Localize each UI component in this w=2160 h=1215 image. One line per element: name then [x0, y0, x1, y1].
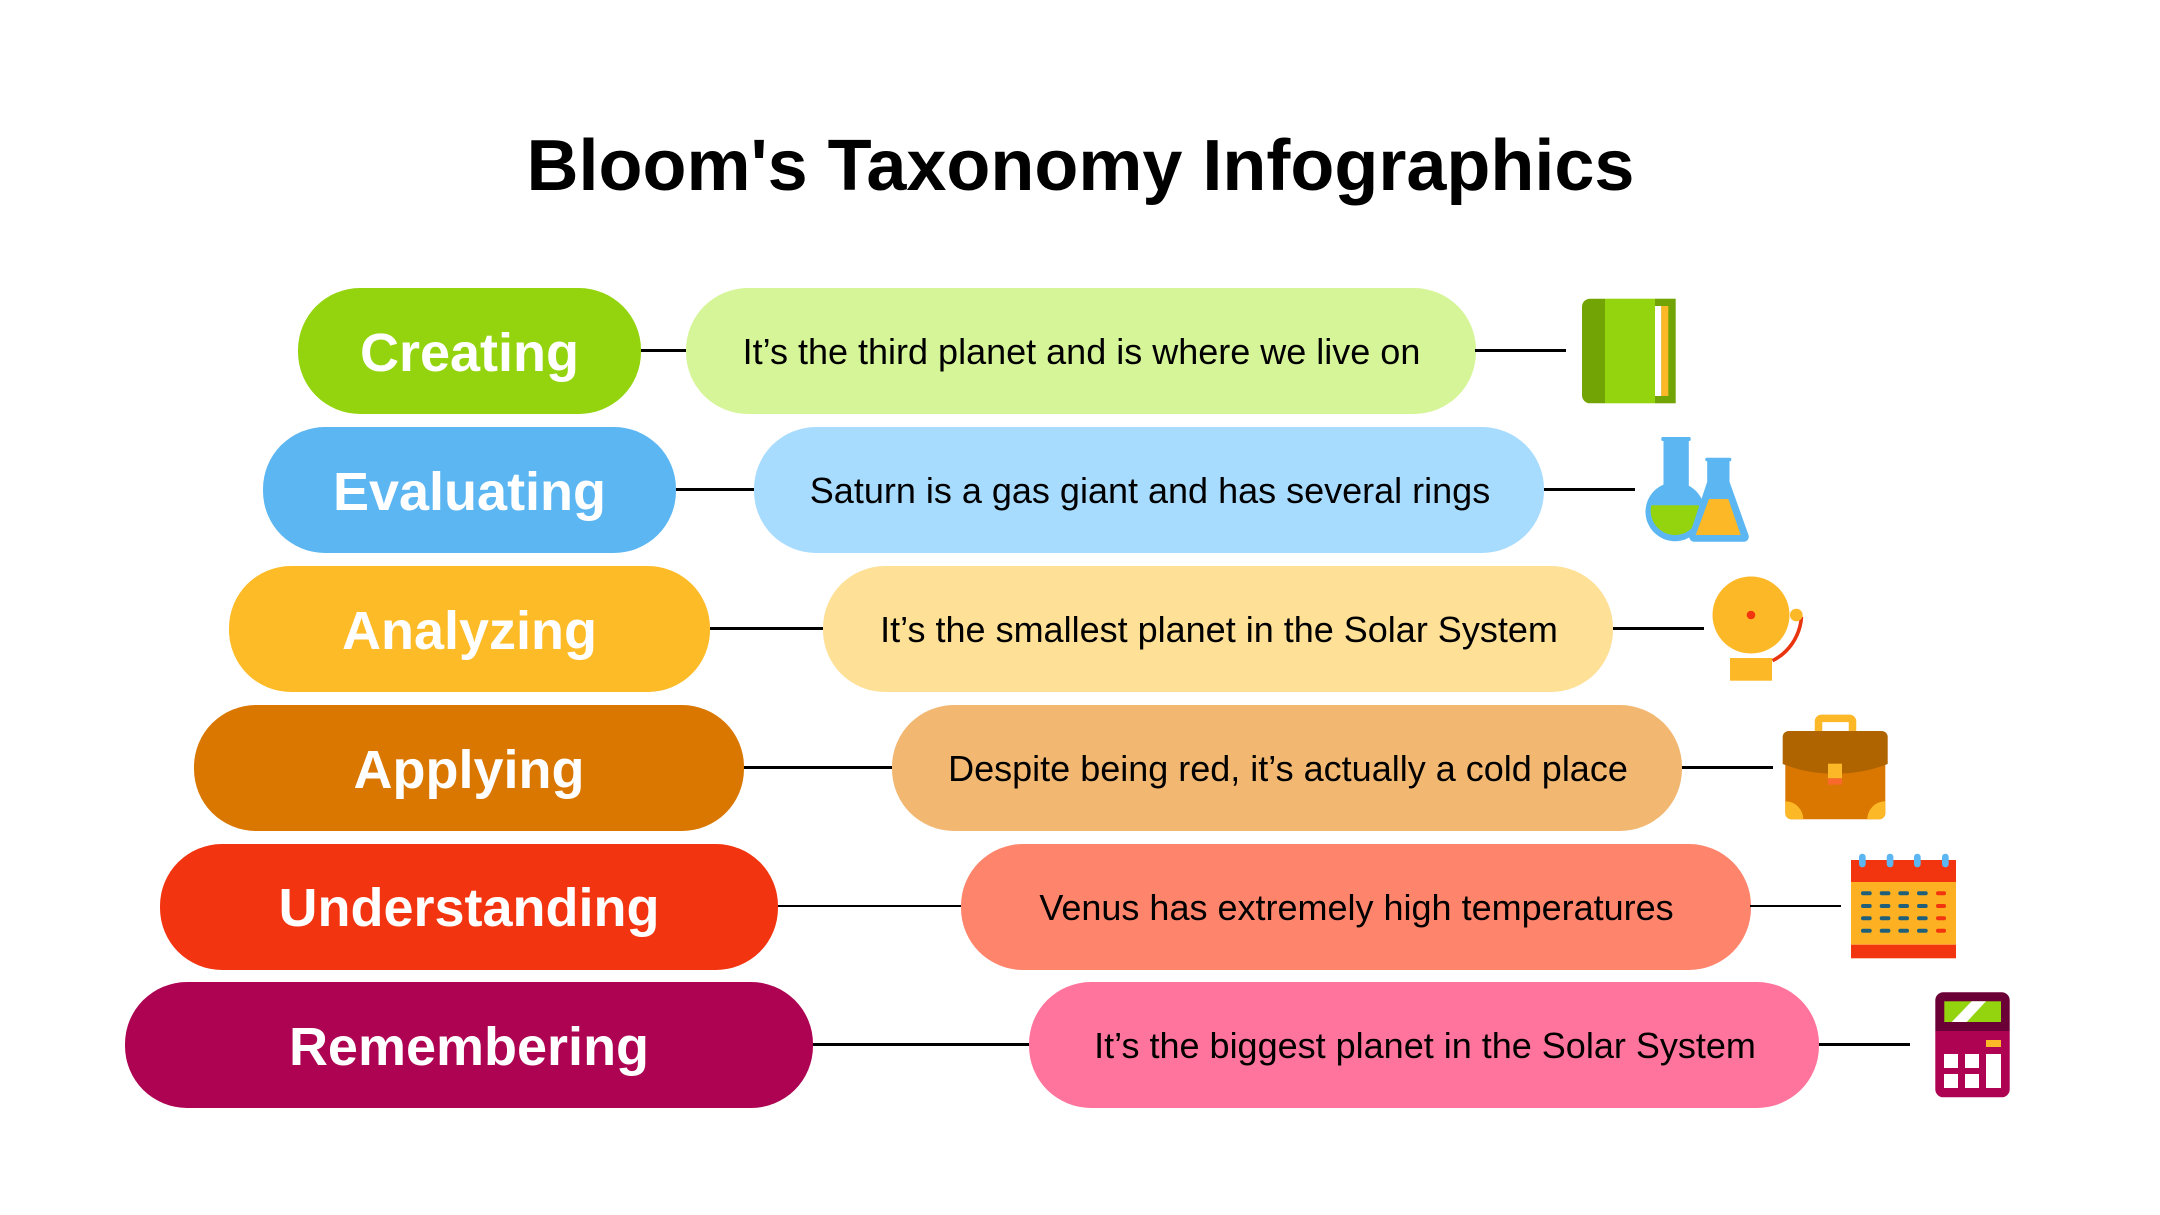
label pill: Applying [194, 705, 744, 831]
label pill: Analyzing: Analyzing [342, 600, 597, 660]
label pill: Remembering: Remembering [289, 1016, 649, 1076]
connector: label to description [641, 349, 686, 352]
icon: calculator [1935, 992, 2010, 1098]
label pill: Analyzing [229, 566, 710, 692]
connector: description to icon [1475, 349, 1566, 352]
description pill: Applying [892, 705, 1682, 831]
connector: description to icon [1750, 904, 1841, 907]
description pill: Remembering: It’s the biggest planet in the Solar System [1094, 1025, 1756, 1066]
description pill: Analyzing: It’s the smallest planet in the Solar System [880, 609, 1558, 650]
label pill: Evaluating [263, 427, 676, 553]
label pill: Remembering [125, 982, 813, 1108]
row: Creating [298, 288, 1676, 414]
label pill: Creating: Creating [360, 322, 579, 382]
connector: label to description [813, 1043, 1029, 1046]
description pill: Creating: It’s the third planet and is where we live on [743, 331, 1420, 372]
connector: description to icon [1682, 766, 1773, 768]
connector: label to description [676, 488, 754, 490]
description pill: Remembering [1029, 982, 1819, 1108]
description pill: Understanding: Venus has extremely high temperatures [1039, 886, 1674, 928]
icon: bell [1712, 576, 1804, 681]
label pill: Understanding: Understanding [278, 878, 660, 938]
label pill: Understanding [160, 844, 778, 970]
connector: label to description [744, 766, 892, 768]
description pill: Analyzing [823, 566, 1613, 692]
icon: calendar [1851, 854, 1956, 958]
connector: label to description [710, 627, 823, 630]
description pill: Understanding [960, 844, 1750, 970]
connector: description to icon [1819, 1043, 1910, 1046]
row: Remembering [125, 982, 2010, 1108]
label pill: Applying: Applying [354, 740, 584, 800]
connector: description to icon [1544, 488, 1635, 490]
icon: book [1582, 298, 1676, 404]
description pill: Evaluating: Saturn is a gas giant and has several rings [810, 470, 1490, 511]
description pill: Applying: Despite being red, it’s actually a cold place [948, 748, 1628, 789]
row: Applying [194, 705, 1888, 831]
connector: label to description [778, 904, 961, 907]
label pill: Evaluating: Evaluating [333, 462, 606, 522]
row: Analyzing [229, 566, 1804, 692]
title: Bloom's Taxonomy Infographics [527, 126, 1634, 206]
label pill: Creating [298, 288, 641, 414]
icon: flasks [1646, 437, 1749, 542]
icon: briefcase [1782, 714, 1888, 820]
row: Understanding [160, 844, 1956, 970]
row: Evaluating [263, 427, 1749, 553]
description pill: Creating [686, 288, 1476, 414]
description pill: Evaluating [754, 427, 1544, 553]
connector: description to icon [1613, 627, 1704, 630]
